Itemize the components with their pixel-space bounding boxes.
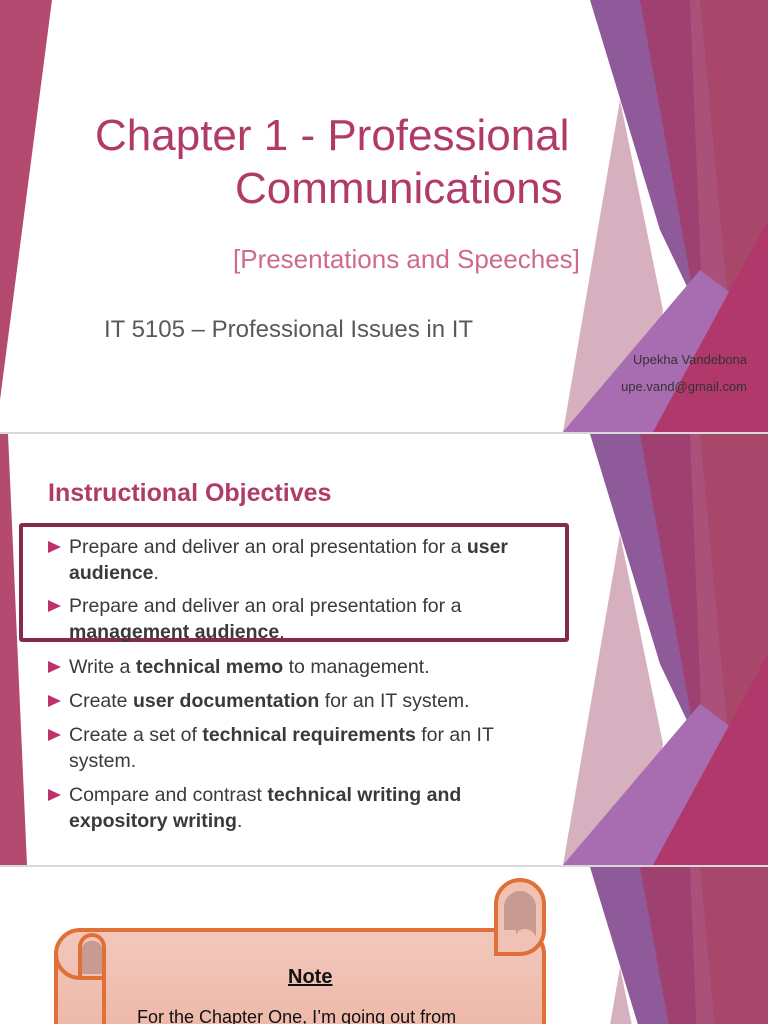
decorative shapes bbox=[0, 0, 768, 432]
bullet list: management audience. bbox=[69, 621, 285, 643]
heading: Instructional Objectives bbox=[48, 479, 331, 507]
bullet list: Compare and contrast technical writing and bbox=[69, 784, 461, 806]
bullet list: Write a technical memo to management. bbox=[69, 656, 430, 678]
slide 1: title: Communications bbox=[235, 164, 563, 213]
author bbox=[621, 352, 747, 394]
bullet list: expository writing. bbox=[69, 810, 242, 832]
bullet list: Create a set of technical requirements for an IT bbox=[69, 724, 494, 746]
author: upe.vand@gmail.com bbox=[621, 379, 747, 394]
subtitle: [Presentations and Speeches] bbox=[233, 244, 580, 274]
bullet list: system. bbox=[69, 750, 136, 772]
decorative shapes bbox=[0, 434, 768, 865]
bullet list bbox=[48, 536, 508, 832]
highlight box bbox=[19, 523, 569, 642]
slide 3: note bbox=[0, 867, 768, 1024]
slide 1: title bbox=[0, 0, 768, 432]
bullet list: Create user documentation for an IT system. bbox=[69, 690, 470, 712]
title: Chapter 1 - Professional bbox=[95, 111, 569, 160]
scroll note bbox=[54, 878, 546, 1024]
bullet list: Prepare and deliver an oral presentation for a user bbox=[69, 536, 508, 558]
course: IT 5105 – Professional Issues in IT bbox=[104, 316, 473, 343]
author: Upekha Vandebona bbox=[633, 352, 747, 367]
bullet list: Prepare and deliver an oral presentation for a bbox=[69, 595, 461, 617]
note heading: Note bbox=[288, 966, 332, 988]
slide 2: objectives bbox=[0, 434, 768, 865]
bullet list: audience. bbox=[69, 562, 159, 584]
decorative shapes bbox=[590, 867, 768, 1024]
